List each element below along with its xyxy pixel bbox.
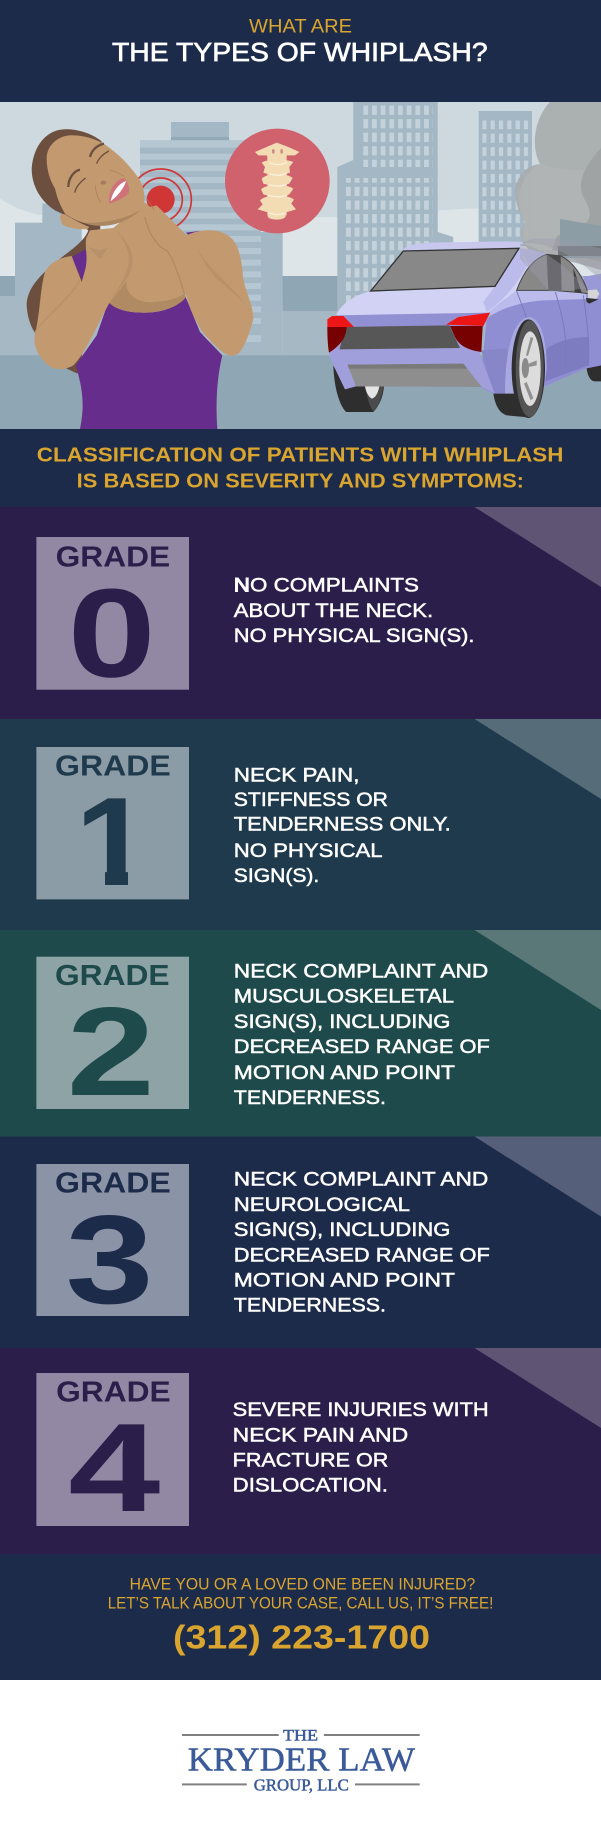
icon: smoke (515, 102, 601, 270)
grade 3 description: TENDERNESS. (234, 1295, 386, 1317)
smoke over car (519, 239, 601, 292)
grade 4 description: DISLOCATION. (233, 1475, 388, 1497)
face (68, 144, 154, 210)
title: THE TYPES OF WHIPLASH? (112, 39, 488, 67)
classification heading panel: CLASSIFICATION OF PATIENTS WITH WHIPLASH (37, 444, 563, 466)
header panel (0, 0, 601, 102)
body side (480, 248, 601, 395)
logo: The Kryder Law Group: THE (283, 1728, 318, 1745)
grade 4 description (233, 1399, 489, 1497)
left arm (34, 228, 134, 369)
rear right wheel (493, 319, 545, 418)
grade 2 description: SIGN(S), INCLUDING (234, 1011, 450, 1033)
classification heading panel (0, 429, 601, 507)
grade 2 description: NECK COMPLAINT AND (234, 961, 488, 983)
grade 2 description (234, 961, 490, 1109)
side mirror (586, 289, 599, 304)
grade 1 badge: 1 (75, 771, 151, 912)
grade 3 badge: GRADE (55, 1168, 171, 1200)
left tail light (327, 316, 354, 353)
grade 1 description (234, 765, 451, 887)
grade 0 description: NO PHYSICAL SIGN(S). (234, 625, 474, 647)
grade 2 badge (36, 957, 189, 1122)
grade 1 description: NECK PAIN, (234, 765, 360, 787)
grade 0 description: ABOUT THE NECK. (234, 600, 433, 622)
trunk (336, 248, 528, 322)
panel: grade 3 (0, 1136, 601, 1349)
call to action text: HAVE YOU OR A LOVED ONE BEEN INJURED? (130, 1575, 475, 1593)
classification heading panel: IS BASED ON SEVERITY AND SYMPTOMS: (77, 471, 524, 493)
grade 1 badge: GRADE (55, 751, 171, 783)
logo panel (0, 1680, 601, 1837)
grade 0 description: NO COMPLAINTS (234, 575, 419, 597)
grade 4 badge (36, 1373, 189, 1538)
pain rings (130, 169, 191, 230)
grade 3 description: NEUROLOGICAL (234, 1194, 410, 1216)
call to action text (108, 1575, 493, 1612)
phone number: (312) 223-1700 (173, 1618, 430, 1655)
grade 0 badge (36, 537, 189, 704)
grade 3 badge: 3 (66, 1189, 154, 1330)
wheel arch (505, 317, 547, 395)
logo: The Kryder Law Group: KRYDER LAW (188, 1742, 416, 1779)
grade 0 badge: 0 (68, 562, 156, 704)
grade 3 badge (36, 1164, 189, 1330)
city background (0, 122, 601, 429)
illustration: woman (27, 129, 330, 429)
grade 4 badge: 4 (68, 1397, 160, 1538)
license plate panel (339, 325, 460, 349)
hair (27, 129, 102, 374)
grade 3 description: MOTION AND POINT (234, 1270, 455, 1292)
grade 3 description: SIGN(S), INCLUDING (234, 1219, 450, 1241)
grade 2 description: MOTION AND POINT (234, 1062, 455, 1084)
grade 4 description: SEVERE INJURIES WITH (233, 1399, 489, 1421)
grade 4 badge: GRADE (56, 1377, 171, 1409)
call to action panel (0, 1554, 601, 1680)
panel: grade 4 (0, 1348, 601, 1554)
rear window (371, 248, 519, 291)
side windows (517, 254, 588, 294)
front far wheel (587, 322, 601, 381)
right tail light (446, 313, 490, 352)
grade 4 description: FRACTURE OR (233, 1450, 388, 1472)
grade 2 description: DECREASED RANGE OF (234, 1036, 490, 1058)
panel: grade 1 (0, 719, 601, 930)
call to action text: LET’S TALK ABOUT YOUR CASE, CALL US, IT’S FREE! (108, 1594, 493, 1612)
grade 0 badge: GRADE (56, 542, 170, 574)
city right buildings (337, 102, 532, 320)
rear left wheel (333, 365, 384, 412)
right arm (143, 205, 253, 356)
spine badge (225, 129, 330, 233)
rear body (327, 313, 495, 394)
hero illustration (0, 102, 601, 429)
grade 2 description: TENDERNESS. (234, 1087, 386, 1109)
grade 1 description: TENDERNESS ONLY. (234, 814, 451, 836)
torso skin (87, 202, 199, 313)
head (47, 135, 144, 225)
logo: The Kryder Law Group (182, 1728, 420, 1795)
grade 3 description (234, 1169, 490, 1317)
door seams (517, 291, 589, 369)
ear (60, 214, 89, 229)
grade 0 description (234, 575, 474, 647)
roof (402, 241, 523, 250)
grade 3 description: NECK COMPLAINT AND (234, 1169, 488, 1191)
grade 4 description: NECK PAIN AND (233, 1425, 408, 1447)
grade 3 description: DECREASED RANGE OF (234, 1245, 490, 1267)
title kicker: WHAT ARE (249, 15, 352, 37)
grade 1 description: STIFFNESS OR (234, 789, 388, 811)
tank top (72, 231, 222, 429)
grade 1 description: SIGN(S). (234, 865, 319, 887)
grade 2 badge: GRADE (55, 960, 170, 992)
tail panel (327, 313, 490, 327)
rear bumper (347, 364, 482, 387)
grade 1 description: NO PHYSICAL (234, 840, 383, 862)
illustration: car (327, 239, 601, 418)
logo: The Kryder Law Group: GROUP, LLC (254, 1776, 349, 1795)
panel: grade 2 (0, 930, 601, 1136)
grade 1 badge (36, 747, 189, 912)
grade 2 description: MUSCULOSKELETAL (234, 986, 454, 1008)
panel: grade 0 (0, 507, 601, 719)
grade 2 badge: 2 (67, 981, 155, 1122)
